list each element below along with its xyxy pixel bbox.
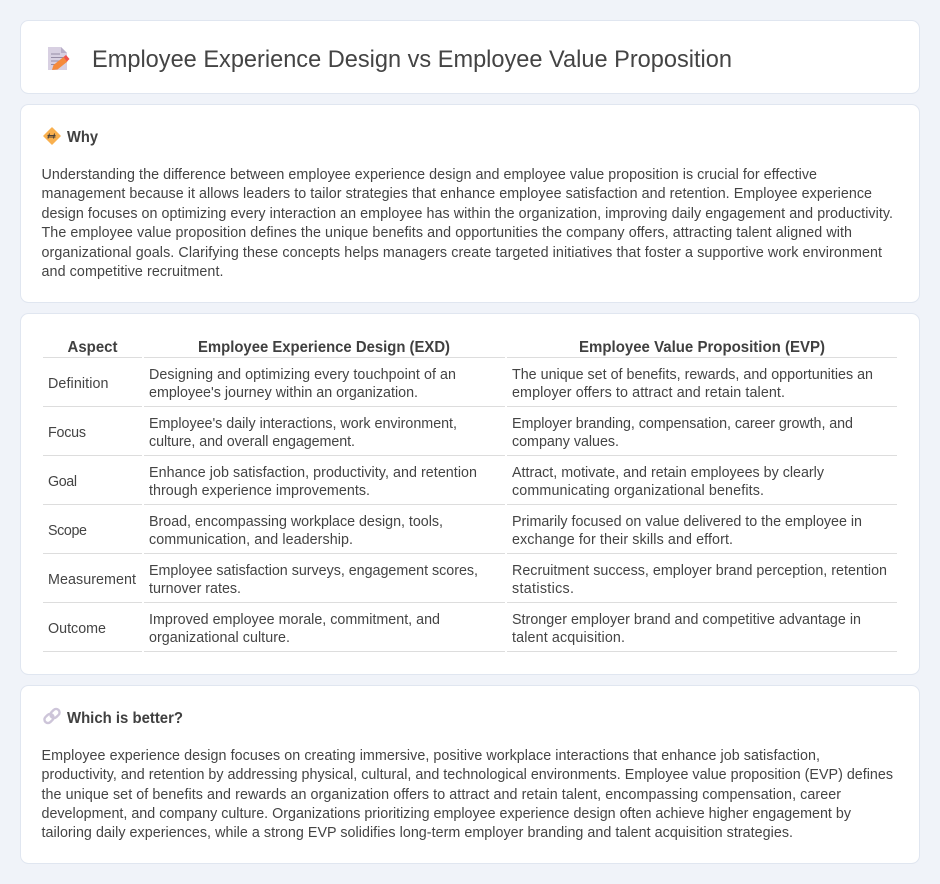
table row: scope: Scope xyxy=(48,523,87,539)
heading: which is better: Which is better? xyxy=(67,710,183,727)
table row: goal: communicating organizational benefits. xyxy=(512,483,764,499)
text block: why paragraph xyxy=(42,167,893,280)
text block: which is better paragraph: Employee experience design focuses on creating immersive, positive workplace interactions that enhance job satisfaction, xyxy=(42,748,820,764)
text block: which is better paragraph: productivity, and retention by addressing physical, cultural, and technological environments. Employee value proposition (EVP) defines xyxy=(42,767,893,783)
table header row xyxy=(68,339,825,356)
table row: goal: Enhance job satisfaction, productivity, and retention xyxy=(149,465,477,481)
text block: why paragraph: management because it allows leaders to tailor strategies that enhance employee satisfaction and retention. Employee experience xyxy=(42,186,872,202)
table row: scope: Primarily focused on value delivered to the employee in xyxy=(512,514,862,530)
table row: focus: Focus xyxy=(48,425,86,441)
table row: scope: exchange for their skills and effort. xyxy=(512,532,733,548)
table row: definition: employee's journey within an organization. xyxy=(149,385,418,401)
table row: definition: Designing and optimizing every touchpoint of an xyxy=(149,367,456,383)
text block: which is better paragraph xyxy=(42,748,893,841)
panel: comparison table xyxy=(20,314,920,674)
table row: outcome: Stronger employer brand and competitive advantage in xyxy=(512,612,861,628)
panel: title header xyxy=(20,20,920,94)
table row: outcome: organizational culture. xyxy=(149,630,290,646)
text block: why paragraph: and competitive recruitment. xyxy=(42,264,224,280)
table row: measurement: Recruitment success, employer brand perception, retention xyxy=(512,563,887,579)
table row: definition xyxy=(48,367,873,401)
table row: definition: Definition xyxy=(48,376,109,392)
table row: outcome: Outcome xyxy=(48,621,106,637)
panel: why xyxy=(20,104,920,302)
table row: focus: company values. xyxy=(512,434,619,450)
table row: scope xyxy=(48,514,862,548)
table row: focus: culture, and overall engagement. xyxy=(149,434,355,450)
table row: focus xyxy=(48,416,853,450)
table row: scope: communication, and leadership. xyxy=(149,532,353,548)
icon: document with pencil xyxy=(48,47,70,70)
table row: focus: Employee's daily interactions, work environment, xyxy=(149,416,457,432)
table header row: Employee Value Proposition (EVP) xyxy=(579,339,825,356)
table header row: Aspect xyxy=(68,339,118,356)
table header row: Employee Experience Design (EXD) xyxy=(198,339,450,356)
icon: chain link xyxy=(43,707,61,725)
table row: measurement xyxy=(48,563,887,597)
table row: goal: Attract, motivate, and retain employees by clearly xyxy=(512,465,825,481)
panel: which is better xyxy=(20,686,920,864)
text block: which is better paragraph: the unique set of benefits and rewards an organization offers to attract and retain talent, encompassing compensation, career xyxy=(42,787,841,803)
heading: why: Why xyxy=(67,129,98,146)
table row: outcome: talent acquisition. xyxy=(512,630,625,646)
table row: definition: The unique set of benefits, rewards, and opportunities an xyxy=(512,367,873,383)
text block: which is better paragraph: development, and company culture. Organizations prioritizing employee experience design often achieve higher engagement by xyxy=(42,806,852,822)
title: Employee Experience Design vs Employee Value Proposition xyxy=(92,46,732,73)
table row: focus: Employer branding, compensation, career growth, and xyxy=(512,416,853,432)
text block: which is better paragraph: tailoring daily experiences, while a strong EVP solidifies long-term employer branding and talent acquisition strategies. xyxy=(42,825,793,841)
table row: goal xyxy=(48,465,825,499)
text block: why paragraph: organizational goals. Clarifying these concepts helps managers create targeted initiatives that foster a supportive work environment xyxy=(42,245,882,261)
table row: measurement: turnover rates. xyxy=(149,581,241,597)
table row: goal: Goal xyxy=(48,474,77,490)
table row: measurement: Employee satisfaction surveys, engagement scores, xyxy=(149,563,478,579)
table row: scope: Broad, encompassing workplace design, tools, xyxy=(149,514,443,530)
text block: why paragraph: The employee value proposition defines the unique benefits and opportunities the company offers, attracting talent aligned with xyxy=(42,225,852,241)
table row: goal: through experience improvements. xyxy=(149,483,370,499)
table row: definition: employer offers to attract and retain talent. xyxy=(512,385,785,401)
text block: why paragraph: Understanding the difference between employee experience design and employee value proposition is crucial for effective xyxy=(42,167,817,183)
table row: outcome xyxy=(48,612,861,646)
text block: why paragraph: design focuses on optimizing every interaction an employee has within the organization, improving daily engagement and productivity. xyxy=(42,206,893,222)
table row: measurement: Measurement xyxy=(48,572,136,588)
table row: outcome: Improved employee morale, commitment, and xyxy=(149,612,440,628)
icon: warning diamond xyxy=(44,128,60,144)
table row: measurement: statistics. xyxy=(512,581,574,597)
